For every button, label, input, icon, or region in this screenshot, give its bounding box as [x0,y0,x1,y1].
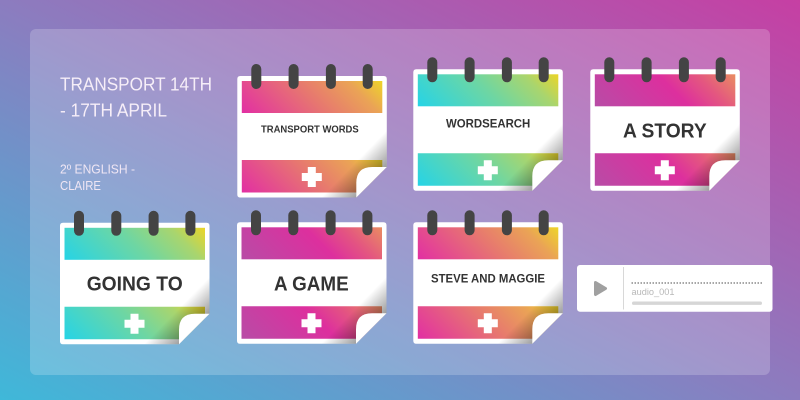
subtitle [60,162,135,193]
card: a story [590,57,740,191]
card: wordsearch: WORDSEARCH [446,117,530,131]
icon: play button [596,282,606,294]
card: steve and maggie [413,210,563,344]
audio file name: audio_001 [632,287,674,298]
title [60,74,212,120]
card: transport words [237,64,387,198]
card: a story: A STORY [623,119,707,142]
card: going to: GOING TO [87,273,183,296]
subtitle: CLAIRE [60,179,101,193]
card: a game: A GAME [274,273,349,296]
subtitle: 2º ENGLISH - [60,162,135,176]
title: TRANSPORT 14TH [60,74,212,94]
title: - 17TH APRIL [60,100,167,120]
card: a game [237,210,386,344]
card: wordsearch [413,57,563,191]
audio player [577,265,772,312]
card: transport words: TRANSPORT WORDS [261,125,359,136]
card: going to [60,211,210,344]
card: steve and maggie: STEVE AND MAGGIE [431,271,545,285]
